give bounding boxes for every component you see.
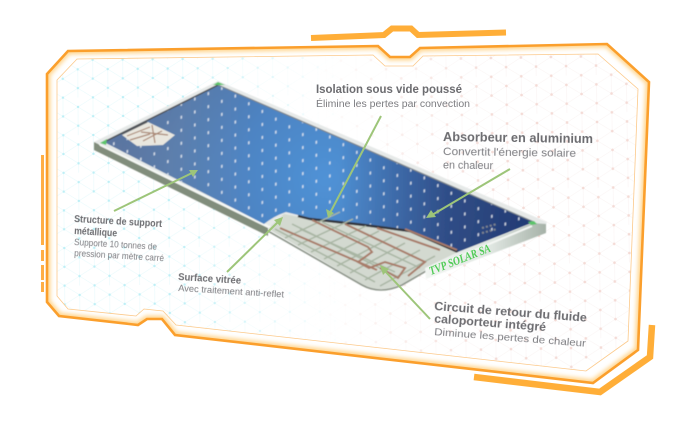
arrow: circuit [380,265,430,319]
infographic: solar panel diagram [41,26,656,396]
right dark spots [482,224,497,233]
glass cut edge [298,216,458,252]
right lower frame [425,223,546,279]
label: isolation [316,82,470,110]
label: surface [177,272,285,301]
brand label: TVP SOLAR SA [427,241,493,278]
corner: right green [528,221,537,225]
panel top rim [94,81,547,228]
label: structure: métallique [74,226,118,240]
accent: bottom-right orange bar [474,325,652,392]
label: isolation: Élimine les pertes par convection [316,97,470,110]
solar panel illustration [94,81,547,290]
label: absorbeur [443,130,593,174]
glass surface [104,85,534,252]
arrow: structure [114,170,198,211]
label: isolation: Isolation sous vide poussé [316,82,462,96]
rim shadow lines [104,85,218,142]
label: structure: Supporte 10 tonnes de [74,237,157,253]
label: structure [72,214,166,264]
cutaway interior base [268,214,460,289]
glass dots [104,85,534,252]
label: circuit: caloporteur intégré [434,312,547,334]
glass tone [104,85,534,252]
arrow: isolation [326,116,381,218]
front side edge [94,142,268,236]
accent: top orange bar [311,28,506,38]
label: absorbeur: en chaleur [443,160,493,172]
label: circuit: Circuit de retour du fluide [434,299,588,325]
label: structure: Structure de support [74,214,163,230]
corner: left green [100,139,107,145]
arrow: surface [227,217,283,272]
label: absorbeur: Convertit l'énergie solaire [443,146,576,160]
top-left cutout [122,122,175,146]
arrow: absorbeur [426,169,510,218]
cutaway outer edge [268,231,426,290]
cutaway structure bars [275,212,435,286]
accent: left orange dashes [41,155,44,292]
label: surface: Surface vitrée [178,272,242,287]
frame: thin inner border [57,54,638,371]
panel background: hexagonal dot grid [58,54,638,368]
corner: top green [213,82,225,85]
frame: orange outer border with glow [47,44,649,383]
label: structure: pression par mètre carré [74,248,164,264]
label: surface: Avec traitement anti-reflet [178,283,285,301]
label: absorbeur: Absorbeur en aluminium [443,130,593,146]
label: circuit [432,299,589,350]
fluid pipes [280,220,457,278]
label: circuit: Diminue les pertes de chaleur [434,326,587,350]
